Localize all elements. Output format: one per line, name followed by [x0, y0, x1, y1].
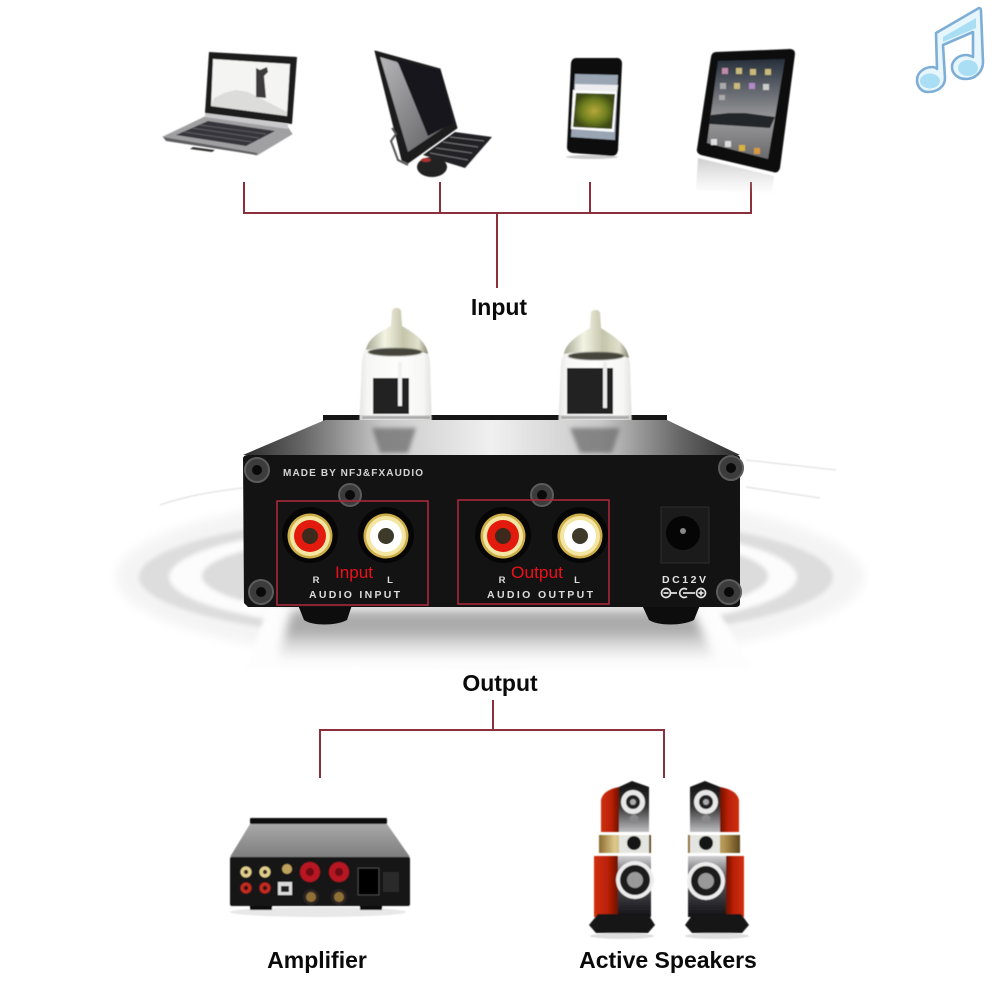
output wiring lines — [320, 700, 664, 778]
output labels: L — [574, 575, 580, 586]
vacuum tube right — [558, 308, 632, 428]
icon: music note — [917, 8, 983, 92]
output labels: AUDIO OUTPUT — [487, 589, 594, 601]
left speaker — [589, 781, 655, 939]
RCA input R — [282, 507, 338, 563]
input labels: L — [387, 575, 393, 586]
icon: active speakers — [589, 781, 749, 939]
DC 12V label: DC12V — [662, 574, 706, 586]
tube reflections — [372, 428, 620, 453]
RCA input L — [358, 507, 414, 563]
icon: laptop — [163, 52, 297, 155]
corner and panel screws — [245, 456, 743, 604]
red box: audio input — [277, 501, 428, 605]
label: Amplifier: Amplifier — [267, 947, 367, 973]
label: Active Speakers: Active Speakers — [579, 947, 757, 973]
input labels: R — [313, 575, 320, 586]
RCA output L — [552, 507, 608, 563]
floor shadow under the preamp — [246, 607, 752, 668]
red label: Output: Output — [511, 563, 563, 582]
preamp rear lip — [323, 415, 667, 421]
vacuum tube left — [358, 306, 432, 428]
input labels — [309, 575, 401, 601]
icon: amplifier — [230, 818, 410, 917]
preamp front face — [243, 455, 740, 607]
icon: all-in-one desktop with keyboard and mouse — [375, 51, 492, 177]
red label: Input: Input — [335, 563, 373, 582]
maker text: MADE BY NFJ&FXAUDIO — [283, 468, 423, 479]
output labels — [487, 575, 594, 601]
output labels: R — [499, 575, 506, 586]
icon: tablet — [696, 49, 795, 194]
label: Output: Output — [462, 670, 538, 696]
red box: audio output — [458, 500, 609, 604]
preamp top plate — [243, 420, 740, 455]
DC power jack — [661, 507, 709, 563]
RCA output R — [475, 507, 531, 563]
input wiring lines — [244, 182, 751, 288]
label: Input: Input — [471, 294, 527, 320]
swirl background behind the preamp — [116, 460, 864, 665]
polarity symbol — [662, 588, 706, 598]
right speaker — [685, 781, 749, 939]
input labels: AUDIO INPUT — [309, 589, 401, 601]
screw centres — [252, 463, 736, 597]
preamp feet — [298, 605, 700, 624]
icon: smartphone — [566, 58, 622, 159]
preamp unit, rear view — [243, 420, 743, 624]
